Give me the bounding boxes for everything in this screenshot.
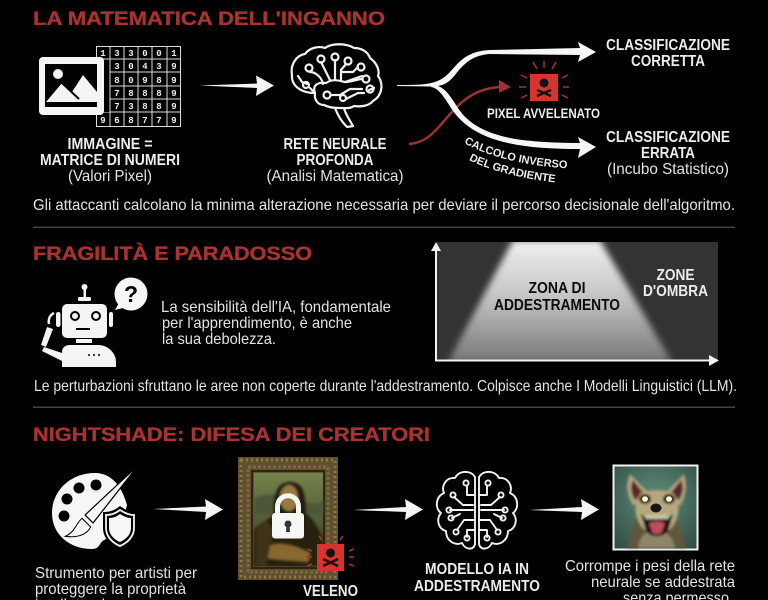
label: immagine [40, 136, 180, 185]
icon: pixel matrix: 9 [171, 89, 177, 99]
icon: pixel matrix [95, 46, 181, 127]
text: sensitivity paradox: la sua debolezza. [162, 331, 276, 348]
icon: pixel matrix: 3 [114, 49, 120, 59]
icon: pixel matrix: 0 [128, 76, 134, 86]
label: modello ia in addestramento: ADDESTRAMENTO [414, 578, 540, 595]
icon: confused robot [41, 284, 116, 367]
icon: palette, brush and shield [52, 471, 137, 550]
icon: pixel matrix: 3 [128, 49, 134, 59]
icon: pixel matrix: 7 [156, 116, 162, 126]
icon: poison badge [306, 534, 354, 571]
icon: pixel matrix: 3 [156, 62, 162, 72]
icon: pixel matrix: 0 [142, 49, 148, 59]
icon: pixel matrix: 0 [128, 62, 134, 72]
text: corrompe i pesi: Corrompe i pesi della rete [565, 558, 735, 575]
text: corrompe i pesi: neurale se addestrata [591, 574, 735, 591]
icon: pixel matrix: 3 [128, 102, 134, 112]
text: attackers summary: Gli attaccanti calcolano la minima alterazione necessaria per deviare il percorso decisionale dell'algoritmo. [33, 197, 735, 214]
icon: image picture [39, 57, 104, 115]
label: zona di addestramento: ZONA DI [528, 280, 586, 297]
icon: pixel matrix: 8 [156, 102, 162, 112]
label: immagine: MATRICE DI NUMERI [40, 152, 180, 169]
label: calcolo inverso del gradiente: CALCOLO INVERSO [466, 138, 567, 168]
chart: training zone and shadow zones [431, 240, 719, 366]
text: sensitivity paradox [161, 299, 391, 348]
label: classificazione corretta: CORRETTA [631, 53, 705, 70]
text: corrompe i pesi [565, 558, 735, 600]
icon: pixel matrix: 9 [100, 116, 106, 126]
icon: pixel matrix: 9 [171, 116, 177, 126]
arrow: branch to wrong classification [431, 84, 596, 158]
label: modello ia in addestramento [414, 561, 540, 595]
icon: pixel matrix: 8 [142, 102, 148, 112]
label: immagine: (Valori Pixel) [68, 168, 152, 185]
text: strumento per artisti [35, 565, 198, 600]
icon: question bubble: ? [124, 281, 138, 307]
text: sensitivity paradox: La sensibilità dell'IA, fondamentale [161, 299, 391, 316]
text: strumento per artisti: Strumento per artisti per [35, 565, 198, 582]
icon: padlock [272, 496, 304, 538]
label: zona di addestramento [494, 280, 620, 314]
icon: pixel matrix: 9 [142, 76, 148, 86]
image: poisoned Mona Lisa in frame [238, 457, 354, 580]
label: classificazione errata: ERRATA [641, 145, 695, 162]
image: corrupted monster dog [614, 466, 698, 550]
icon: pixel matrix: 8 [128, 89, 134, 99]
label: rete neurale: RETE NEURALE [284, 136, 387, 153]
icon: pixel matrix: 9 [171, 102, 177, 112]
label: zona di addestramento: ADDESTRAMENTO [494, 297, 620, 314]
label: immagine: IMMAGINE = [68, 136, 152, 153]
label: classificazione corretta: CLASSIFICAZIONE [606, 37, 730, 54]
label: rete neurale: (Analisi Matematica) [266, 168, 404, 185]
icon: pixel matrix: 1 [171, 49, 177, 59]
label: classificazione errata: (Incubo Statistico) [607, 161, 729, 178]
icon: poisoned pixel [519, 61, 569, 101]
icon: pixel matrix: 8 [156, 89, 162, 99]
icon: question bubble [114, 278, 148, 310]
arrow: palette to painting [153, 499, 223, 520]
icon: neural network brain [292, 44, 381, 127]
text: sensitivity paradox: per l'apprendimento, è anche [162, 315, 352, 332]
label: rete neurale: PROFONDA [296, 152, 374, 169]
heading: fragilità e paradosso: FRAGILITÀ E PARADOSSO [33, 242, 312, 265]
label: calcolo inverso del gradiente [466, 138, 567, 182]
label: modello ia in addestramento: MODELLO IA IN [425, 561, 529, 578]
label: zone d'ombra: D'OMBRA [643, 283, 708, 300]
label: classificazione errata: CLASSIFICAZIONE [606, 129, 730, 146]
icon: pixel matrix: 7 [114, 102, 120, 112]
icon: pixel matrix: 6 [114, 116, 120, 126]
label: pixel avvelenato: PIXEL AVVELENATO [487, 106, 600, 121]
icon: pixel matrix: 9 [171, 62, 177, 72]
label: zone d'ombra [643, 267, 708, 300]
icon: pixel matrix: 9 [171, 76, 177, 86]
icon: pixel matrix: 4 [142, 62, 148, 72]
heading: la matematica dell'inganno: LA MATEMATICA DELL'INGANNO [33, 8, 385, 30]
icon: pixel matrix: 7 [114, 89, 120, 99]
heading: nightshade: NIGHTSHADE: DIFESA DEI CREATORI [33, 424, 430, 446]
text: strumento per artisti: proteggere la proprietà [35, 581, 186, 598]
icon: pixel matrix: 3 [114, 62, 120, 72]
arrow: branch to correct classification [397, 42, 596, 86]
icon: symmetric circuit brain [437, 472, 517, 549]
icon: pixel matrix: 7 [142, 116, 148, 126]
arrow: model to corrupted output [529, 499, 599, 520]
arrow: red gradient path [409, 80, 511, 144]
icon: pixel matrix: 8 [156, 76, 162, 86]
arrow: painting to model [353, 499, 423, 520]
icon: pixel matrix: 0 [156, 49, 162, 59]
label: classificazione errata [606, 129, 730, 178]
label: rete neurale [266, 136, 404, 185]
icon: pixel matrix: 8 [128, 116, 134, 126]
label: veleno: VELENO [303, 583, 358, 600]
label: calcolo inverso del gradiente: DEL GRADIENTE [469, 154, 556, 182]
label: classificazione corretta [606, 37, 730, 70]
icon: pixel matrix: 8 [142, 89, 148, 99]
label: zone d'ombra: ZONE [656, 267, 695, 284]
arrow: image to network [199, 76, 274, 96]
icon: pixel matrix: 1 [100, 49, 106, 59]
icon: pixel matrix: 8 [114, 76, 120, 86]
